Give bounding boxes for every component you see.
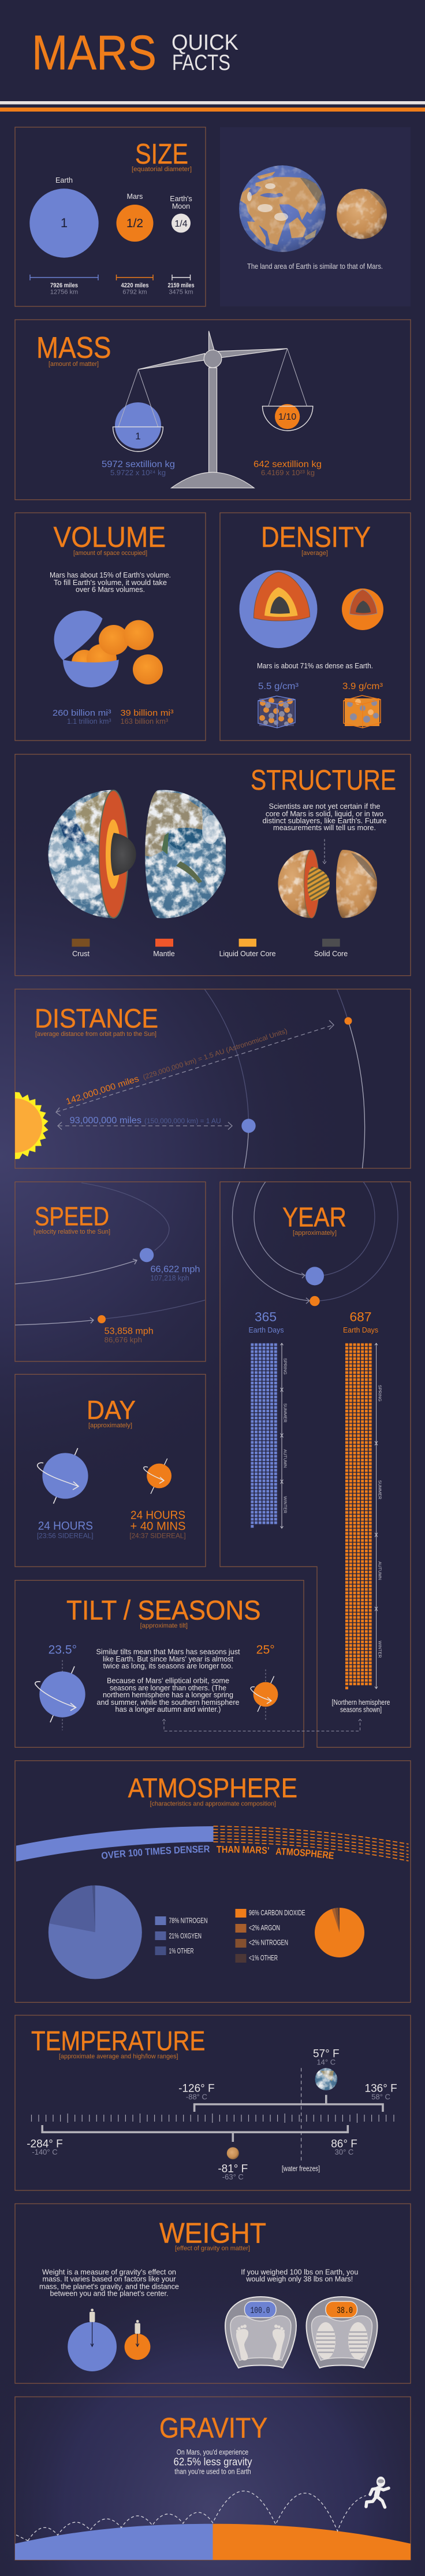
boot prints xyxy=(316,2322,368,2359)
legend: layers: Liquid Outer Core xyxy=(219,950,276,958)
mass values mars: 642 sextillion kg xyxy=(253,460,322,469)
panel: day: [approximately] xyxy=(88,1422,132,1429)
tilt text: and summer, while the southern hemisphere xyxy=(97,1698,240,1707)
mars day text xyxy=(129,1509,186,1540)
diameter values: 2159 miles xyxy=(167,282,194,289)
panel: volume: [amount of space occupied] xyxy=(73,550,147,557)
earth cut face xyxy=(99,790,128,918)
tilt text: Because of Mars' elliptical orbit, some xyxy=(107,1676,229,1685)
panel: day xyxy=(15,1374,206,1567)
tilt text: northern hemisphere has a longer spring xyxy=(103,1691,233,1699)
mass values mars xyxy=(253,460,322,477)
temperature labels: -126° F xyxy=(178,2083,215,2095)
heading: temperature: TEMPERATURE xyxy=(31,2026,205,2056)
earth rotation xyxy=(38,1448,88,1504)
right pan: mars xyxy=(262,349,313,431)
panel: gravity xyxy=(15,2397,411,2560)
mars seasons ruler xyxy=(375,1343,382,1689)
panel: volume xyxy=(15,513,206,741)
balance scale xyxy=(138,331,288,488)
temperature labels: 14° C xyxy=(316,2057,335,2066)
mars atmosphere band xyxy=(214,1826,409,1861)
earth tilt: 23.5° xyxy=(49,1644,77,1657)
earth year label xyxy=(248,1310,284,1334)
mars right half xyxy=(335,849,379,919)
earth seasons ruler: SPRING xyxy=(283,1358,288,1375)
tilt text: like Earth. But since Mars' year is almost xyxy=(103,1655,234,1663)
weight text right: would weigh only 38 lbs on Mars! xyxy=(245,2275,353,2283)
panel: mass: [amount of matter] xyxy=(49,361,99,368)
density values: 3.9 g/cm³ xyxy=(342,682,383,691)
sun xyxy=(15,1092,49,1159)
density text: Mars is about 71% as dense as Earth. xyxy=(257,662,373,670)
earth circle xyxy=(29,176,99,258)
diameter values: 4220 miles xyxy=(121,282,149,289)
mars legend xyxy=(236,1909,305,1963)
volume text: To fill Earth's volume, it would take xyxy=(54,579,167,587)
earth with mars land xyxy=(239,165,326,252)
arrow: to mars core xyxy=(323,839,326,864)
mars with person xyxy=(125,2320,150,2360)
panel: year: [approximately] xyxy=(293,1230,337,1237)
earth left half xyxy=(46,789,136,919)
earth right half xyxy=(141,789,226,919)
mars year label: 687 xyxy=(350,1310,372,1324)
mars distance label xyxy=(65,1026,289,1107)
temperature labels: 86° F xyxy=(331,2138,357,2150)
panel: size: [equatorial diameter] xyxy=(132,166,192,173)
diameter values: 12756 km xyxy=(50,289,78,296)
diameter values: 6792 km xyxy=(122,289,147,296)
density caption: THAN MARS' xyxy=(216,1846,269,1854)
title: QUICK xyxy=(172,31,238,55)
density values: 5.5 g/cm³ xyxy=(258,682,299,691)
bounce path xyxy=(16,2491,366,2541)
speed orbits xyxy=(15,1183,205,1325)
arrow: earth distance xyxy=(58,1122,232,1130)
mars year label xyxy=(343,1310,378,1334)
mass values earth: 5.9722 x 10²⁴ kg xyxy=(110,468,166,477)
structure text: core of Mars is solid, liquid, or in two xyxy=(266,810,383,818)
volume values: 260 billion mi³ xyxy=(53,708,111,718)
gravity text xyxy=(173,2448,252,2475)
diameter values xyxy=(50,282,194,296)
temperature labels: -63° C xyxy=(222,2172,244,2181)
heading: size: SIZE xyxy=(135,139,188,170)
mars day text: 24 HOURS xyxy=(131,1509,185,1522)
mars hatched core xyxy=(307,867,330,901)
volume values xyxy=(53,708,174,726)
mars legend: <2% ARGON xyxy=(249,1924,280,1932)
earth speed xyxy=(140,1248,200,1282)
mars density cube xyxy=(344,695,381,728)
mars left half xyxy=(277,849,330,919)
diameter values: 7926 miles xyxy=(50,282,78,289)
volume text: over 6 Mars volumes. xyxy=(76,586,145,594)
panel: tilt seasons xyxy=(15,1581,361,1747)
mars speed xyxy=(98,1315,154,1344)
mars seasons ruler: AUTUMN xyxy=(378,1561,382,1580)
mars speed: 86,676 kph xyxy=(105,1335,142,1344)
weight text right xyxy=(241,2268,358,2283)
mars year label: Earth Days xyxy=(343,1326,378,1334)
heading: structure: STRUCTURE xyxy=(251,765,396,796)
mars day grid xyxy=(345,1343,373,1689)
panel: atmosphere: [characteristics and approximate composition] xyxy=(150,1800,276,1807)
moon circle: Earth's xyxy=(170,195,192,203)
ground: earth side xyxy=(15,2524,212,2560)
panel: weight xyxy=(15,2204,411,2383)
mars day text: [24:37 SIDEREAL] xyxy=(129,1533,186,1540)
mars legend: <2% NITROGEN xyxy=(249,1939,288,1947)
mars bracket xyxy=(42,2125,348,2142)
hemisphere note xyxy=(331,1698,390,1713)
earth solid core xyxy=(111,833,136,876)
density caption: OVER 100 TIMES DENSER xyxy=(102,1845,210,1859)
volume text: Mars has about 15% of Earth's volume. xyxy=(50,571,171,579)
earth seasons ruler xyxy=(281,1343,288,1528)
earth tilt xyxy=(35,1644,85,1730)
earth planet xyxy=(241,1119,256,1133)
moon circle: 1/4 xyxy=(174,219,188,229)
mars day text: + 40 MINS xyxy=(131,1520,186,1533)
gravity text: 62.5% less gravity xyxy=(173,2456,252,2467)
panel: atmosphere xyxy=(14,1760,411,2003)
temperature labels: 30° C xyxy=(335,2148,353,2156)
thermometer ruler xyxy=(31,2114,394,2123)
icon: astronaut xyxy=(366,2477,389,2507)
tilt text: has a longer autumn and winter.) xyxy=(115,1705,221,1713)
legend: layers: Mantle xyxy=(153,950,175,958)
mars pie chart xyxy=(315,1908,364,1957)
weight text left: Weight is a measure of gravity's effect on xyxy=(42,2268,176,2276)
mars seasons ruler: SUMMER xyxy=(378,1480,382,1500)
mars seasons ruler: WINTER xyxy=(378,1641,382,1658)
legend: layers xyxy=(72,939,348,958)
mars distance label: (229,000,000 km) = 1.5 AU (Astronomical Units) xyxy=(142,1027,288,1081)
earth & mars markers xyxy=(305,1267,324,1306)
mass values earth: 5972 sextillion kg xyxy=(102,460,175,469)
heading: gravity: GRAVITY xyxy=(159,2413,267,2444)
mars legend: 96% CARBON DIOXIDE xyxy=(249,1909,305,1917)
panel: speed: [velocity relative to the Sun] xyxy=(33,1228,110,1235)
mars scale: 38.0 xyxy=(337,2305,353,2316)
tilt text: seasons are longer than others. (The xyxy=(110,1684,226,1692)
panel: density xyxy=(220,513,411,741)
temperature labels: -140° C xyxy=(32,2148,58,2156)
earth year label: 365 xyxy=(255,1310,277,1324)
structure text xyxy=(262,802,387,832)
volume text xyxy=(50,571,171,594)
heading: density: DENSITY xyxy=(261,521,371,553)
title: FACTS xyxy=(172,51,230,75)
footprints xyxy=(236,2325,285,2360)
earth seasons ruler: AUTUMN xyxy=(283,1449,288,1468)
earth legend: 1% OTHER xyxy=(169,1947,194,1955)
ground: mars side xyxy=(212,2524,411,2560)
earth day text: [23:56 SIDEREAL] xyxy=(37,1533,94,1540)
heading: mass: MASS xyxy=(36,331,111,365)
temperature labels: -81° F xyxy=(218,2163,248,2175)
heading: year: YEAR xyxy=(282,1202,346,1233)
panel: year xyxy=(220,1182,411,1747)
earth atmosphere band xyxy=(16,1826,214,1861)
structure text: Scientists are not yet certain if the xyxy=(269,802,381,810)
earth scale: 100.0 xyxy=(251,2305,270,2316)
panel: temperature xyxy=(15,2015,411,2190)
earth seasons ruler: SUMMER xyxy=(283,1403,288,1423)
density caption xyxy=(102,1845,334,1859)
panel: mass xyxy=(15,320,411,499)
density values xyxy=(258,682,383,691)
title xyxy=(32,25,238,80)
mass values earth xyxy=(102,460,175,477)
panel: temperature: [approximate average and high/low ranges] xyxy=(59,2053,178,2060)
panel: distance xyxy=(15,989,411,1171)
heading: tilt: TILT / SEASONS xyxy=(66,1594,261,1625)
earth legend: 21% OXGYEN xyxy=(169,1932,202,1940)
mars tilt: 25° xyxy=(256,1644,275,1657)
panel: distance: [average distance from orbit path to the Sun] xyxy=(35,1031,156,1038)
panel: structure xyxy=(15,754,411,976)
earth legend xyxy=(155,1916,208,1955)
earth circle: 1 xyxy=(61,216,68,230)
mars distance label: 142,000,000 miles xyxy=(65,1074,140,1107)
moon circle xyxy=(170,195,192,232)
earth distance label xyxy=(70,1116,221,1126)
mars small xyxy=(227,2147,239,2159)
right pan: mars: 1/10 xyxy=(278,412,296,422)
mars circle xyxy=(117,193,154,242)
heading: volume: VOLUME xyxy=(53,521,166,553)
mars scale xyxy=(306,2297,378,2368)
temperature labels: 57° F xyxy=(313,2048,340,2060)
earth small xyxy=(315,2068,338,2091)
gravity text: than you're used to on Earth xyxy=(174,2467,251,2475)
earth day grid xyxy=(251,1343,278,1528)
tilt text: Similar tilts mean that Mars has seasons just xyxy=(96,1648,240,1656)
density caption: ATMOSPHERE xyxy=(276,1848,334,1859)
earth distance label: 93,000,000 miles xyxy=(70,1116,141,1126)
mars legend: <1% OTHER xyxy=(249,1954,278,1962)
mars seasons ruler: SPRING xyxy=(378,1385,382,1402)
mars rotation xyxy=(144,1459,172,1494)
weight text left: mass, the planet's gravity, and the distance xyxy=(39,2282,179,2290)
temperature labels: -284° F xyxy=(27,2138,63,2150)
weight text left xyxy=(39,2268,179,2298)
panel: weight: [effect of gravity on matter] xyxy=(175,2245,250,2252)
water freezes line: [water freezes] xyxy=(282,2165,320,2173)
earth with person xyxy=(68,2309,117,2371)
heading: atmosphere: ATMOSPHERE xyxy=(128,1772,297,1803)
mars cut face xyxy=(304,850,319,918)
title: MARS xyxy=(32,25,156,80)
mars planet xyxy=(344,1017,352,1024)
hemisphere note: [Northern hemisphere xyxy=(331,1698,390,1707)
mars cutaway xyxy=(342,589,383,630)
volume values: 163 billion km³ xyxy=(120,717,169,726)
earth cutaway xyxy=(239,570,318,648)
earth day text xyxy=(37,1520,94,1540)
panel: speed xyxy=(15,1182,206,1361)
weight text left: between you and the planet's center. xyxy=(50,2290,169,2298)
year orbits xyxy=(232,1182,398,1304)
earth day text: 24 HOURS xyxy=(38,1520,93,1533)
mars tilt xyxy=(251,1644,278,1720)
heading: weight: WEIGHT xyxy=(159,2218,266,2249)
volume values: 39 billion mi³ xyxy=(120,708,174,718)
heading: distance: DISTANCE xyxy=(35,1004,158,1034)
weight text right: If you weighed 100 lbs on Earth, you xyxy=(241,2268,358,2276)
earth bracket xyxy=(195,2095,383,2112)
orbits xyxy=(204,990,365,1171)
spheres in earth xyxy=(54,610,163,687)
moon circle: Moon xyxy=(172,202,190,210)
panel: tilt seasons: [approximate tilt] xyxy=(140,1622,188,1629)
temperature labels: 58° C xyxy=(371,2092,390,2101)
mars globe xyxy=(337,188,387,239)
left pan: earth xyxy=(113,369,163,451)
arrow: mars distance xyxy=(56,1020,334,1116)
mars circle: 1/2 xyxy=(126,217,143,230)
earth distance label: (150,000,000 km) = 1 AU xyxy=(144,1118,221,1125)
temperature labels: 136° F xyxy=(365,2083,397,2095)
earth speed: 66,622 mph xyxy=(150,1265,200,1274)
earth scale xyxy=(225,2297,296,2368)
tilt text: twice as long, its seasons are longer too. xyxy=(103,1662,233,1670)
hemisphere note: seasons shown] xyxy=(340,1705,382,1713)
temperature labels: -88° C xyxy=(186,2092,207,2101)
structure text: distinct sublayers, like Earth's. Future xyxy=(262,817,387,825)
gravity text: On Mars, you'd experience xyxy=(177,2448,248,2456)
heading: day: DAY xyxy=(87,1395,136,1424)
legend: layers: Crust xyxy=(72,950,90,958)
panel: size xyxy=(15,127,206,306)
diameter bars xyxy=(30,275,191,280)
weight text left: mass. It varies based on factors like your xyxy=(43,2275,176,2283)
tilt text xyxy=(96,1648,240,1713)
earth speed: 107,218 kph xyxy=(150,1274,189,1282)
earth density cube xyxy=(258,696,295,728)
earth circle: Earth xyxy=(55,176,73,184)
earth year label: Earth Days xyxy=(248,1326,284,1334)
temperature labels xyxy=(27,2048,397,2181)
mars speed: 53,858 mph xyxy=(105,1326,154,1337)
volume values: 1.1 trillion km³ xyxy=(67,717,111,726)
diameter values: 3475 km xyxy=(169,289,193,296)
left pan: earth: 1 xyxy=(135,431,141,442)
panel: land area xyxy=(220,127,411,306)
structure text: measurements will tell us more. xyxy=(273,824,376,832)
mass values mars: 6.4169 x 10²³ kg xyxy=(261,468,315,477)
earth seasons ruler: WINTER xyxy=(283,1496,288,1513)
earth pie chart xyxy=(49,1885,142,1979)
mars circle: Mars xyxy=(127,193,143,201)
panel: density: [average] xyxy=(301,550,328,557)
earth legend: 78% NITROGEN xyxy=(169,1916,208,1924)
heading: speed: SPEED xyxy=(35,1201,109,1231)
arrow: seasons link xyxy=(163,1719,361,1731)
legend: layers: Solid Core xyxy=(314,950,348,958)
land caption: The land area of Earth is similar to that of Mars. xyxy=(247,262,383,271)
